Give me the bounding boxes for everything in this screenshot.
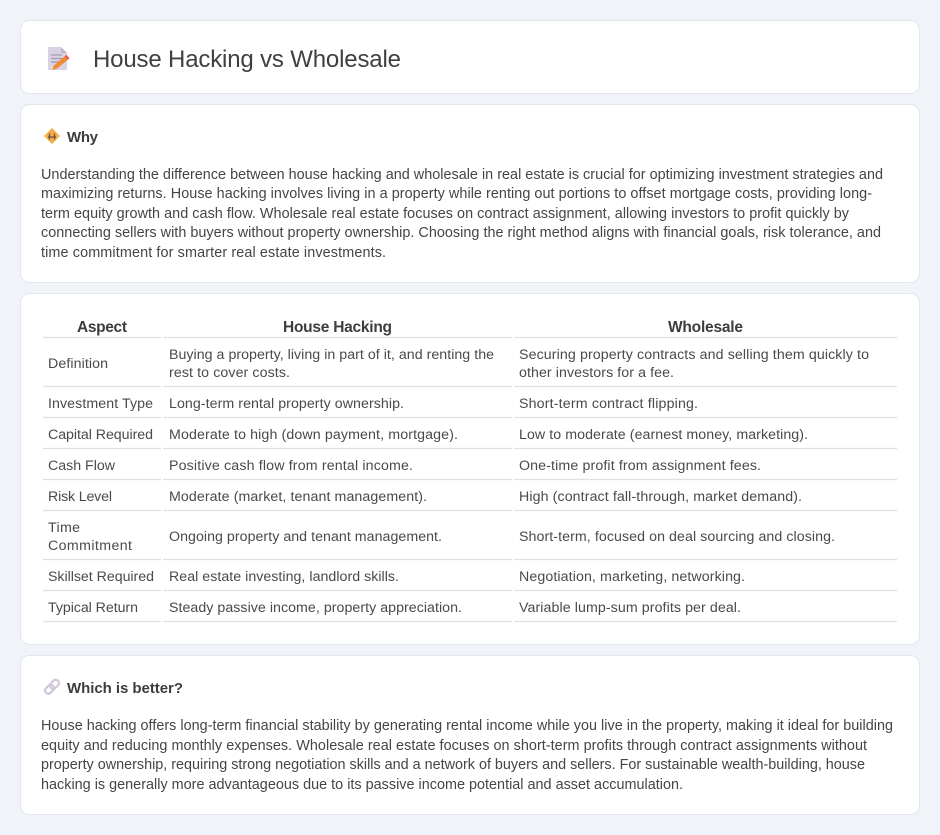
text block: why paragraph: term equity growth and cash flow. Wholesale real estate focuses on contract assignment, allowing investors to profit quickly by bbox=[41, 206, 850, 222]
row: capital required: Capital Required bbox=[48, 427, 153, 443]
table header: House Hacking bbox=[283, 319, 392, 336]
row: risk level: Risk Level bbox=[48, 489, 112, 505]
row: time commitment: Short-term, focused on deal sourcing and closing. bbox=[519, 529, 835, 545]
table header: Wholesale bbox=[668, 319, 743, 336]
row: definition: other investors for a fee. bbox=[519, 365, 674, 381]
heading: why: Why bbox=[67, 129, 99, 146]
text block: which is better paragraph: equity and reducing monthly expenses. Wholesale real estate focuses on short-term profits through contract assignments without bbox=[41, 738, 867, 754]
panel: which is better bbox=[20, 656, 920, 814]
row: capital required: Low to moderate (earnest money, marketing). bbox=[519, 427, 808, 443]
text block: which is better paragraph: property ownership, requiring strong negotiation skills and a network of buyers and sellers. For sustainable wealth-building, house bbox=[41, 757, 865, 773]
row: risk level: Moderate (market, tenant management). bbox=[169, 489, 427, 505]
row: cash flow: One-time profit from assignment fees. bbox=[519, 458, 761, 474]
text block: why paragraph: maximizing returns. House hacking involves living in a property while renting out portions to offset mortgage costs, providing long- bbox=[41, 186, 872, 202]
panel: why bbox=[20, 104, 920, 282]
row: cash flow bbox=[48, 458, 761, 474]
table header: Aspect bbox=[77, 319, 127, 336]
row: cash flow: Cash Flow bbox=[48, 458, 116, 474]
text block: why paragraph: time commitment for smarter real estate investments. bbox=[41, 245, 386, 261]
row: time commitment: Time bbox=[48, 520, 80, 536]
row: typical return: Steady passive income, property appreciation. bbox=[169, 600, 462, 616]
row: time commitment: Commitment bbox=[48, 538, 132, 554]
icon: warning diamond bbox=[44, 128, 60, 144]
text block: why paragraph bbox=[41, 167, 883, 261]
row: skillset required: Skillset Required bbox=[48, 569, 154, 585]
row: definition: Buying a property, living in part of it, and renting the bbox=[169, 347, 494, 363]
icon: document with pencil bbox=[48, 47, 70, 70]
text block: which is better paragraph: hacking is generally more advantageous due to its passive income potential and asset accumulation. bbox=[41, 777, 683, 793]
row: typical return: Variable lump-sum profits per deal. bbox=[519, 600, 741, 616]
row: investment type: Long-term rental property ownership. bbox=[169, 396, 404, 412]
panel: comparison table bbox=[20, 294, 920, 644]
row: investment type: Investment Type bbox=[48, 396, 153, 412]
text block: why paragraph: connecting sellers with buyers without property ownership. Choosing the right method aligns with financial goals, risk tolerance, and bbox=[41, 225, 881, 241]
table header bbox=[77, 319, 743, 336]
text block: why paragraph: Understanding the difference between house hacking and wholesale in real estate is crucial for optimizing investment strategies and bbox=[41, 167, 883, 183]
row: definition: Definition bbox=[48, 356, 108, 372]
row: cash flow: Positive cash flow from rental income. bbox=[169, 458, 413, 474]
heading: which is better: Which is better? bbox=[67, 680, 183, 697]
row: definition: Securing property contracts and selling them quickly to bbox=[519, 347, 869, 363]
row: capital required: Moderate to high (down payment, mortgage). bbox=[169, 427, 458, 443]
row: skillset required bbox=[48, 569, 745, 585]
row: investment type: Short-term contract flipping. bbox=[519, 396, 698, 412]
row: risk level bbox=[48, 489, 802, 505]
row: typical return bbox=[48, 600, 741, 616]
row: typical return: Typical Return bbox=[48, 600, 138, 616]
row: definition bbox=[48, 347, 869, 381]
row: investment type bbox=[48, 396, 698, 412]
row: skillset required: Negotiation, marketing, networking. bbox=[519, 569, 745, 585]
title: House Hacking vs Wholesale bbox=[93, 46, 401, 73]
row: skillset required: Real estate investing, landlord skills. bbox=[169, 569, 399, 585]
panel: title header bbox=[20, 20, 920, 94]
icon: chain link bbox=[44, 678, 60, 695]
row: risk level: High (contract fall-through, market demand). bbox=[519, 489, 802, 505]
text block: which is better paragraph: House hacking offers long-term financial stability by generating rental income while you live in the property, making it ideal for building bbox=[41, 718, 893, 734]
row: time commitment: Ongoing property and tenant management. bbox=[169, 529, 442, 545]
text block: which is better paragraph bbox=[41, 718, 893, 793]
row: definition: rest to cover costs. bbox=[169, 365, 290, 381]
row: time commitment bbox=[48, 520, 835, 554]
row: capital required bbox=[48, 427, 808, 443]
